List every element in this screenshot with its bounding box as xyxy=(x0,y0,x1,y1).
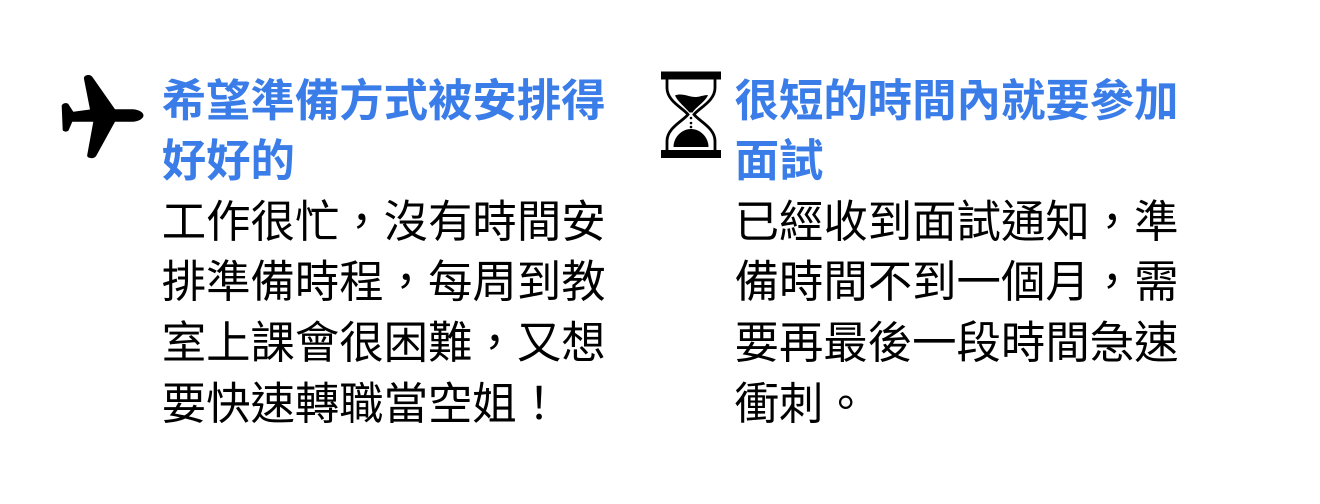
body text: right: 要再最後一段時間急速 xyxy=(735,319,1179,368)
heading: right: 很短的時間內就要參加 xyxy=(735,77,1179,126)
text block: right column xyxy=(735,77,1179,429)
body text: left: 要快速轉職當空姐！ xyxy=(162,380,561,429)
icon: airplane xyxy=(62,75,144,158)
body text: right xyxy=(735,198,1179,429)
heading: left xyxy=(162,77,606,186)
heading: right xyxy=(735,77,1179,186)
heading: left: 希望準備方式被安排得 xyxy=(162,77,606,126)
body text: right: 衝刺。 xyxy=(735,380,868,429)
text block: left column xyxy=(162,77,606,429)
body text: left: 工作很忙，沒有時間安 xyxy=(162,198,606,247)
icon: hourglass xyxy=(661,72,721,158)
body text: left: 室上課會很困難，又想 xyxy=(162,319,606,368)
heading: right: 面試 xyxy=(735,137,823,186)
body text: right: 備時間不到一個月，需 xyxy=(735,258,1179,307)
body text: right: 已經收到面試通知，準 xyxy=(735,198,1179,247)
body text: left: 排準備時程，每周到教 xyxy=(162,258,606,307)
heading: left: 好好的 xyxy=(162,137,295,186)
body text: left xyxy=(162,198,606,429)
